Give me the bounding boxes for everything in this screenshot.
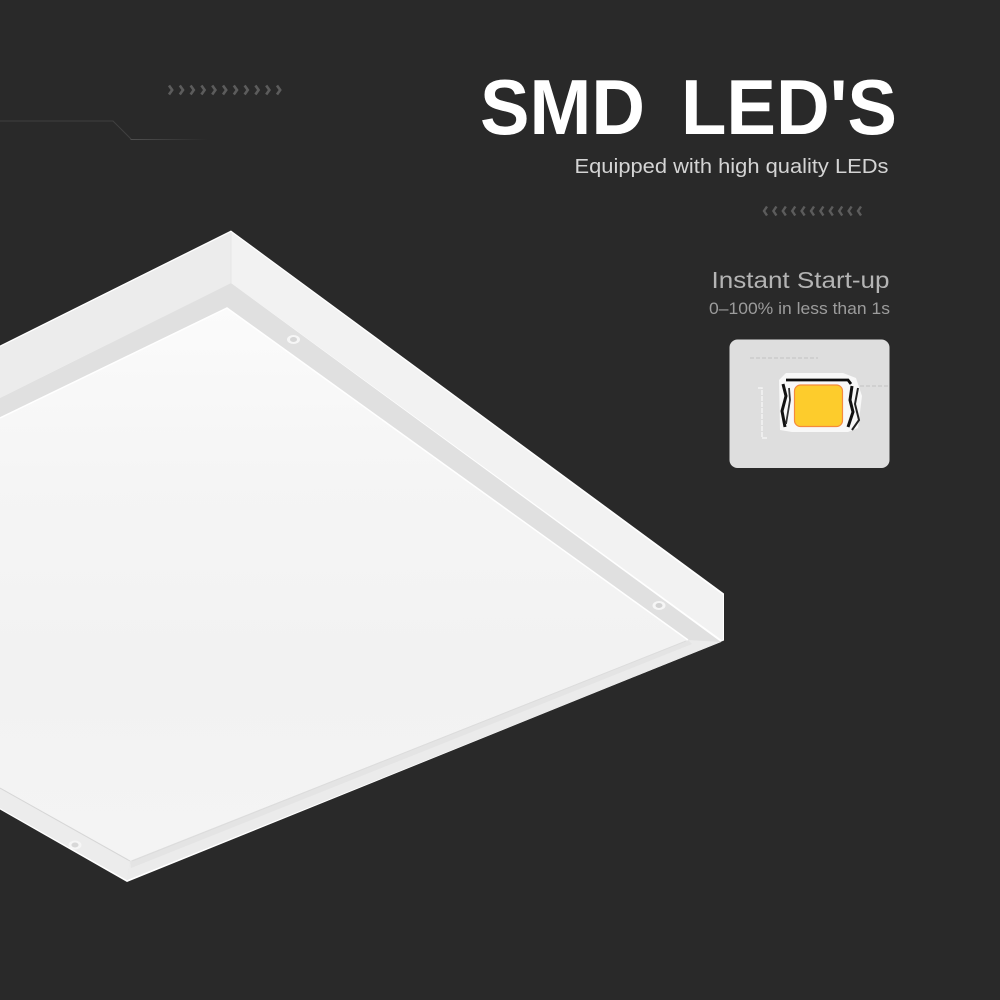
screw bottom [68,840,82,850]
side wall left [0,232,231,398]
flat frame top edges [0,283,721,880]
subtitle: Equipped with high quality LEDs [574,156,888,178]
frame lower right strip [127,640,721,880]
outer white edge highlight [0,230,724,882]
screw right [652,601,666,610]
panel rim highlights [0,308,688,640]
corner crease [230,232,232,283]
title: LED'S [681,63,897,151]
decorative circuit line [0,121,208,140]
feature heading: instant start-up: Instant Start-up [712,267,890,293]
decorative chevron row right [764,206,861,216]
screw top [287,335,300,344]
title: SMD [480,63,645,151]
lower bevel [130,640,692,868]
title [480,63,897,151]
frame lower left strip [0,788,130,880]
decorative chevron row top left [169,86,280,94]
side wall right [231,232,723,641]
panel diffuser [0,308,688,861]
LED panel product [0,230,724,882]
feature subtext: 0–100% in less than 1s [709,299,890,318]
LED chip photo [730,340,890,468]
